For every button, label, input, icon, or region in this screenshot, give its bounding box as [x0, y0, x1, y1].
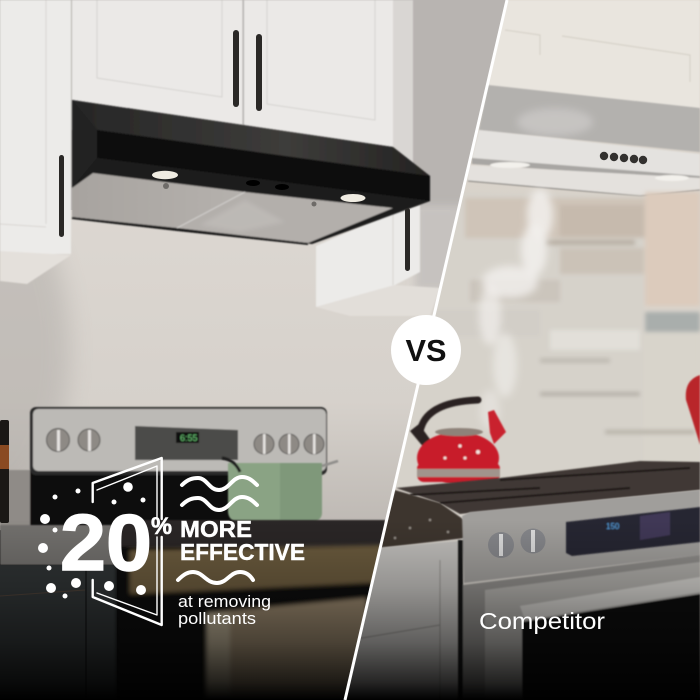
red kettle	[410, 400, 506, 484]
stove control panel: 6:55	[180, 433, 198, 443]
label: competitor: Competitor	[479, 608, 605, 634]
icon: air waves	[178, 477, 257, 583]
countertop	[0, 520, 385, 565]
gas grates	[396, 461, 700, 514]
stat: 20%: 20	[60, 498, 152, 587]
heading: more effective: MORE	[180, 516, 252, 542]
competitor upper cabinets	[480, 0, 700, 110]
lower cabinet	[354, 541, 458, 684]
upper left cabinet	[0, 0, 71, 284]
range hood black	[72, 100, 430, 244]
hood lights	[152, 171, 366, 206]
callout: 20% more effective	[38, 458, 305, 628]
icon: pollutant particles	[38, 482, 146, 598]
green pot	[222, 458, 338, 522]
VS badge: VS	[406, 333, 446, 368]
stove control panel	[0, 407, 327, 530]
lower left cabinet	[0, 565, 117, 686]
stove front	[458, 490, 700, 700]
backsplash tiles	[464, 190, 700, 436]
cabinet handles	[59, 30, 410, 271]
red object at right edge	[686, 375, 700, 445]
text: at removing pollutants: at removing	[178, 592, 271, 611]
text: at removing pollutants	[178, 592, 271, 628]
granite counter	[380, 490, 470, 548]
heading: more effective: EFFECTIVE	[180, 539, 305, 565]
stove knobs	[488, 528, 546, 558]
upper center cabinet doors	[72, 0, 413, 165]
hood controls	[246, 180, 289, 190]
VS badge	[391, 315, 461, 385]
competitor hood	[468, 85, 700, 196]
control display	[566, 507, 700, 556]
divider line	[345, 0, 507, 700]
control display: 150	[606, 522, 620, 531]
backsplash wall	[0, 210, 450, 530]
bottle	[0, 420, 9, 523]
hood knobs	[600, 152, 647, 164]
stat: 20%: %	[151, 513, 172, 540]
text: at removing pollutants: pollutants	[178, 609, 256, 628]
heading: more effective	[180, 516, 305, 565]
panel: our hood scene	[0, 0, 520, 700]
lower right cabinet section	[316, 205, 440, 316]
oven front	[117, 545, 387, 700]
icon: filter frame	[93, 458, 162, 625]
bottom dark gradient	[0, 520, 700, 700]
steam	[479, 108, 593, 430]
panel: competitor scene	[340, 0, 700, 700]
